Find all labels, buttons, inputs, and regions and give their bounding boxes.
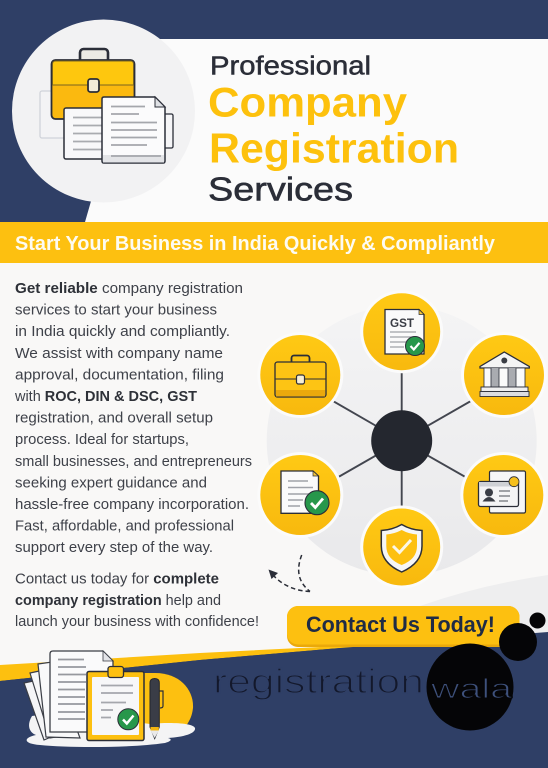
node: GST document — [360, 290, 443, 373]
clipboard — [87, 666, 144, 740]
yellow diagonal stripe — [0, 645, 420, 681]
body text: approval, documentation, filing — [15, 367, 224, 383]
title: Professional — [210, 52, 371, 80]
body text: process. Ideal for startups, — [15, 432, 189, 448]
arrow: dashed curved arrows — [268, 555, 310, 592]
title: Registration — [209, 124, 459, 172]
node: briefcase — [257, 332, 343, 418]
body text: small businesses, and entrepreneurs — [15, 454, 252, 470]
swoosh behind button — [420, 575, 548, 650]
node: ID card — [460, 452, 546, 538]
header circle with briefcase and documents — [12, 20, 195, 202]
subtitle band — [0, 222, 548, 263]
icon: briefcase — [52, 49, 134, 119]
body text — [14, 281, 259, 630]
subtitle band: Start Your Business in India Quickly & Compliantly — [15, 233, 496, 255]
title: Services — [208, 170, 353, 208]
body text: hassle-free company incorporation. — [15, 497, 249, 513]
white ground blob — [27, 712, 195, 747]
icon: back document right — [150, 114, 173, 148]
hub diagram — [257, 290, 547, 588]
title: Company — [208, 78, 408, 126]
pen — [150, 678, 163, 738]
header white panel — [85, 39, 548, 222]
contact button — [287, 606, 520, 647]
connector lines — [300, 331, 504, 547]
body text: in India quickly and compliantly. — [15, 324, 230, 340]
icon: front document — [102, 97, 165, 163]
node: shield — [360, 506, 443, 588]
body text: registration, and overall setup — [15, 411, 213, 427]
body panel — [0, 262, 548, 668]
body text: Fast, affordable, and professional — [15, 519, 234, 535]
body text: with ROC, DIN & DSC, GST — [14, 389, 197, 405]
body text: company registration help and — [15, 593, 221, 609]
main paper — [50, 651, 113, 732]
contact button: Contact Us Today! — [306, 612, 495, 637]
body text: support every step of the way. — [15, 540, 213, 556]
body text: services to start your business — [15, 303, 217, 319]
node: document with check — [257, 452, 343, 538]
centre hub — [371, 410, 432, 471]
body text: seeking expert guidance and — [15, 475, 207, 491]
title — [208, 52, 459, 208]
logo: registration wala — [213, 612, 546, 730]
logo: registration wala: registration — [213, 663, 424, 701]
node: GST document: GST — [390, 318, 414, 330]
body text: launch your business with confidence! — [15, 614, 259, 630]
navy lower section — [0, 632, 548, 768]
fanned papers — [24, 680, 60, 740]
body text: Contact us today for complete — [15, 572, 219, 588]
yellow blob — [125, 673, 193, 726]
body text: Get reliable company registration — [15, 281, 243, 297]
logo: registration wala: wala — [430, 673, 513, 704]
node: bank building — [461, 332, 547, 418]
body text: We assist with company name — [15, 346, 223, 362]
bottom illustration: documents and clipboard — [24, 651, 195, 747]
icon: middle document — [64, 108, 112, 159]
icon: back document left — [40, 91, 70, 138]
grey backdrop disc — [267, 306, 537, 576]
